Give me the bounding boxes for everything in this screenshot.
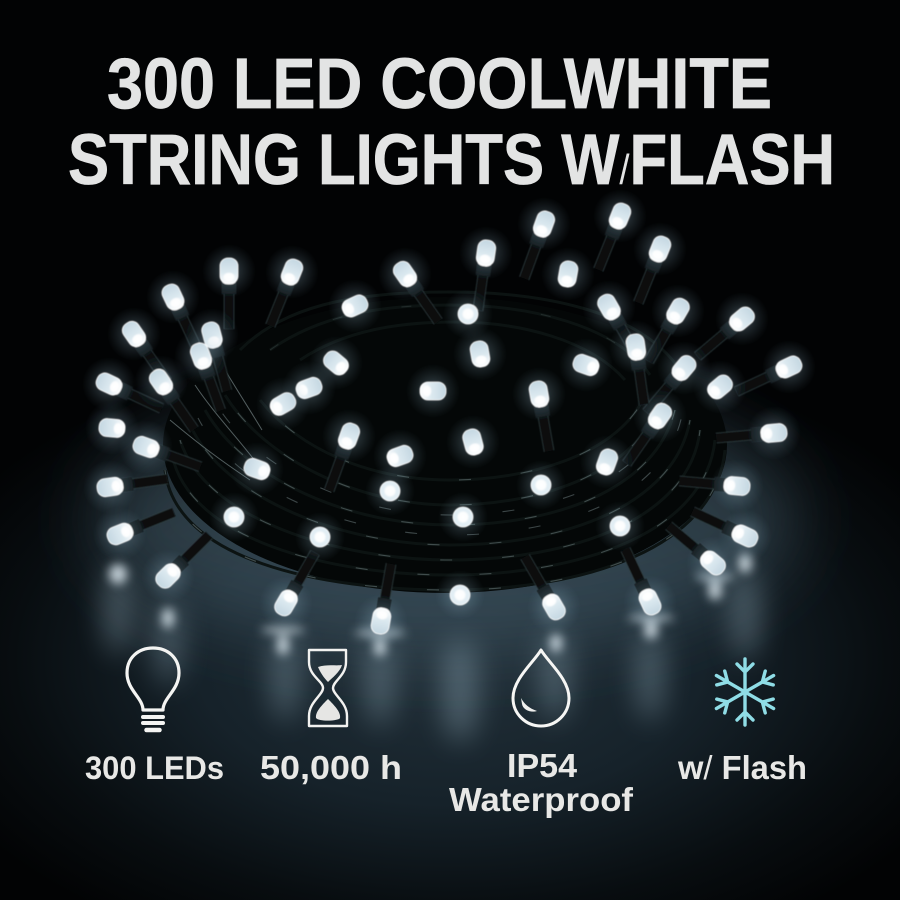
icon: hourglass [309, 650, 347, 726]
feature: w/ Flash [677, 659, 807, 786]
label: 300 LEDs: 300 LEDs [85, 750, 224, 786]
label: IP54 Waterproof: IP54 [507, 747, 578, 784]
feature: 50,000 h [260, 650, 402, 786]
ambient glow around the coil [95, 390, 795, 650]
title [68, 45, 835, 200]
icon: light bulb [127, 648, 179, 730]
icon: snowflake [712, 659, 778, 725]
title: STRING LIGHTS W/FLASH [68, 121, 835, 200]
floor reflections of the lights [103, 553, 760, 742]
feature: IP54 Waterproof [449, 650, 634, 818]
label: 50,000 h: 50,000 h [260, 749, 402, 786]
label: IP54 Waterproof [449, 747, 634, 818]
wire coil [163, 292, 727, 593]
label: IP54 Waterproof: Waterproof [449, 781, 634, 818]
title: 300 LED COOLWHITE [107, 45, 772, 124]
label: w/ Flash: w/ Flash [677, 749, 807, 786]
feature: 300 LEDs [85, 648, 224, 786]
icon: water drop [513, 650, 569, 726]
LED lights [73, 181, 825, 652]
